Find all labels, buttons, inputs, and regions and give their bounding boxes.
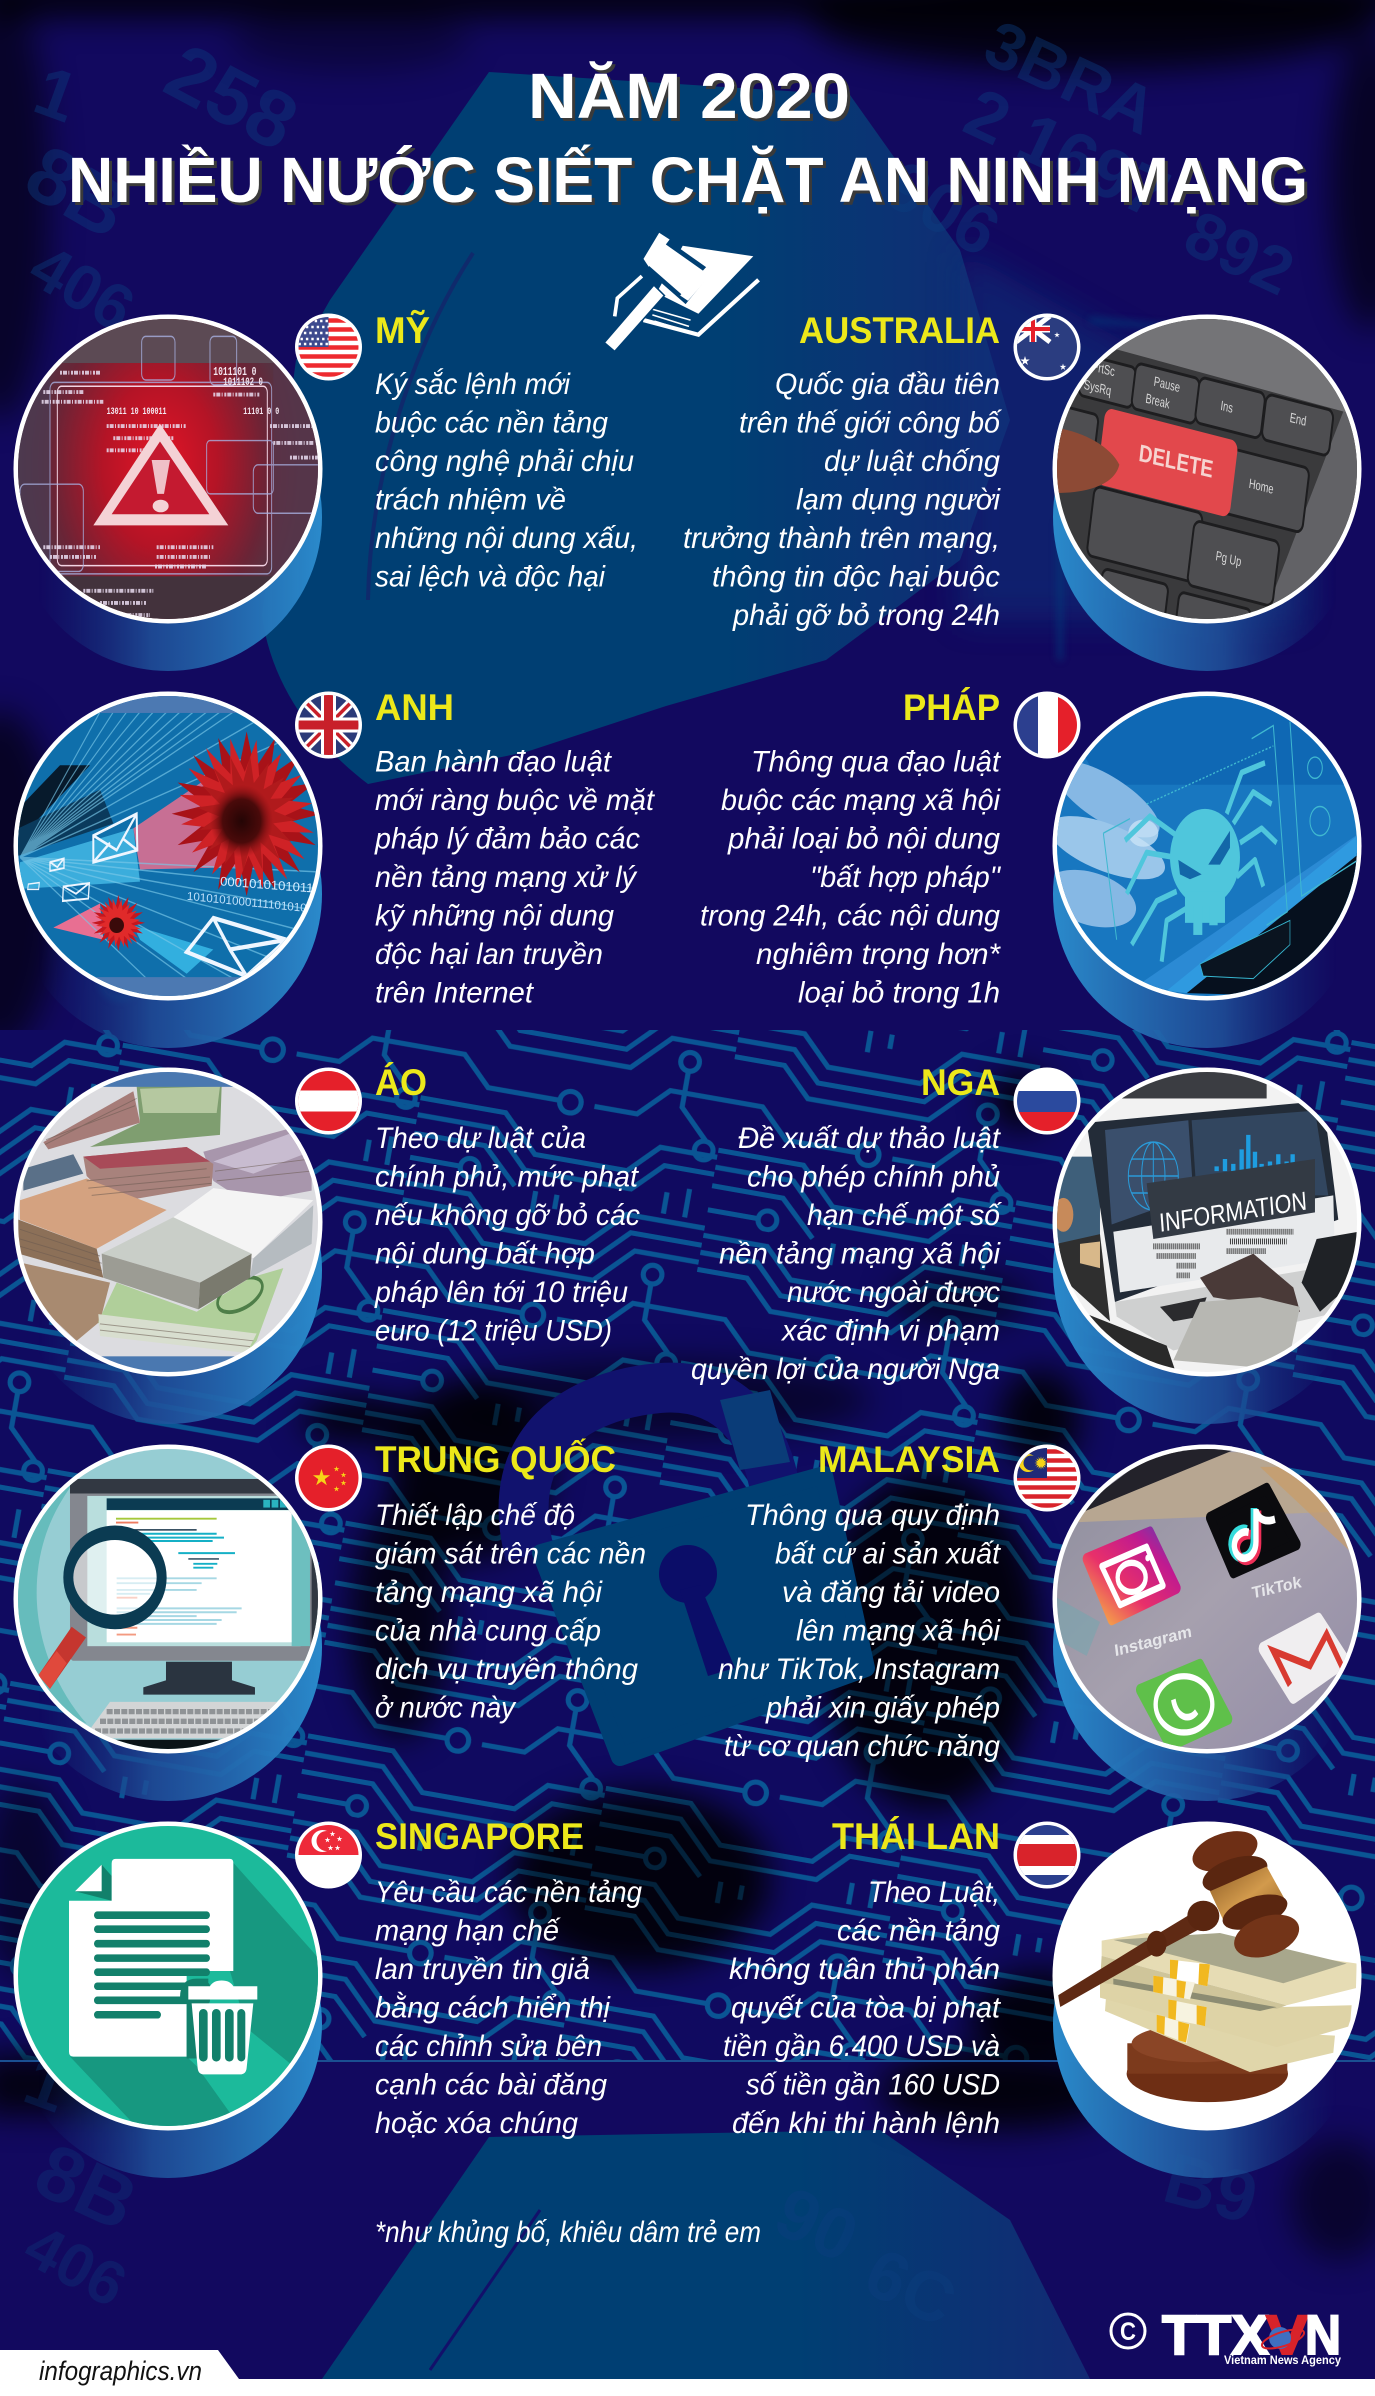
heading: Trung Quốc: TRUNG QUỐC — [375, 1438, 616, 1480]
image disc: euro banknotes — [14, 1068, 322, 1424]
text: Singapore — [375, 1876, 643, 2140]
text: Thái Lan: tiền gần 6.400 USD và — [723, 2030, 1000, 2063]
panel: Áo — [0, 1050, 640, 1424]
image disc: social app icons — [1033, 1433, 1375, 1801]
heading: Australia: AUSTRALIA — [799, 310, 1000, 351]
text: Australia: thông tin độc hại buộc — [712, 560, 1000, 594]
text: Áo: chính phủ, mức phạt — [375, 1160, 640, 1194]
text: Áo — [374, 1122, 640, 1348]
image disc: delete key: Break — [1145, 391, 1171, 412]
text: Pháp — [700, 746, 1002, 1010]
background: cyber data image (top) — [0, 0, 1375, 1050]
panel: Malaysia — [718, 1433, 1375, 1801]
image disc: delete key: Pause — [1153, 374, 1181, 396]
image disc: virus e-mail: 0001010101011 — [220, 875, 314, 896]
text: Singapore: bằng cách hiển thị — [375, 1992, 611, 2024]
heading: Malaysia: MALAYSIA — [818, 1439, 1000, 1480]
logo: TTXVN: Vietnam News Agency — [1224, 2353, 1341, 2367]
heading: Singapore: SINGAPORE — [375, 1816, 584, 1857]
background: cyber data image (top): 3BRA — [974, 6, 1168, 149]
background: cyber data image (top): 2 1697 — [954, 73, 1181, 234]
heading: Áo: ÁO — [375, 1062, 427, 1103]
logo: TTXVN: V — [1266, 2303, 1308, 2366]
text: Áo: nội dung bất hợp — [375, 1238, 595, 1270]
flag: Australia — [1014, 314, 1080, 380]
footnote: *như khủng bố, khiêu dâm trẻ em — [375, 2216, 761, 2249]
text: Áo: Theo dự luật của — [375, 1122, 586, 1155]
text: Áo: nếu không gỡ bỏ các — [375, 1199, 640, 1232]
footer band and source tab: infographics.vn — [39, 2356, 202, 2386]
logo: TTXVN: N — [1305, 2303, 1341, 2366]
image disc: delete key: Home — [1248, 476, 1274, 497]
text: Singapore: cạnh các bài đăng — [375, 2068, 608, 2102]
logo: TTXVN: TTX — [1162, 2303, 1269, 2366]
title — [68, 60, 1308, 216]
heading: Thái Lan: THÁI LAN — [832, 1816, 1000, 1857]
text: Áo: pháp lên tới 10 triệu — [374, 1276, 628, 1309]
text: Nga: hạn chế một số — [807, 1199, 1002, 1232]
background: data image (bottom): B9 — [1156, 2138, 1265, 2239]
image disc: delete key: PrtSc — [1091, 359, 1116, 380]
image disc: delete key: Ins — [1220, 398, 1234, 416]
flag: Austria — [295, 1068, 362, 1134]
text: Pháp: buộc các mạng xã hội — [721, 784, 1001, 817]
flag: Singapore — [295, 1822, 362, 1888]
background: data image (bottom): 8B — [23, 2126, 150, 2248]
image disc: delete key: DELETE — [1138, 440, 1215, 484]
text: Nga: Đề xuất dự thảo luật — [738, 1122, 1002, 1155]
background: padlock silhouette — [524, 1388, 866, 1757]
text: Trung Quốc — [375, 1499, 646, 1724]
text: Singapore: hoặc xóa chúng — [375, 2107, 579, 2140]
text: Mỹ: những nội dung xấu, — [375, 522, 638, 555]
text: Malaysia: phải xin giấy phép — [765, 1692, 1000, 1724]
text: Pháp: phải loại bỏ nội dung — [727, 822, 1001, 856]
image disc: monitor and magnifier — [0, 1428, 333, 1801]
background: cyber data image (top): 892 — [1174, 196, 1305, 309]
text: Nga: nước ngoài được — [787, 1276, 1000, 1309]
text: Pháp: loại bỏ trong 1h — [798, 976, 1000, 1010]
text: Singapore: các chỉnh sửa bên — [375, 2030, 602, 2063]
background: cyber data image (top): 8B — [12, 128, 145, 256]
text: Anh: pháp lý đảm bảo các — [374, 822, 640, 856]
panel: Mỹ — [0, 300, 638, 671]
text: Anh: độc hại lan truyền — [375, 938, 603, 971]
text: Trung Quốc: của nhà cung cấp — [375, 1614, 601, 1648]
flag: France — [1014, 692, 1080, 758]
text: Mỹ: công nghệ phải chịu — [375, 445, 634, 478]
icon: gavel on law book — [604, 233, 759, 351]
panel: Anh — [0, 678, 656, 1048]
panel: Nga — [691, 1050, 1375, 1424]
text: Thái Lan: quyết của tòa bị phạt — [731, 1992, 1002, 2024]
text: Australia: phải gỡ bỏ trong 24h — [732, 599, 1000, 632]
text: Australia — [683, 368, 1003, 632]
background: cyber data image (top): 406 — [18, 230, 146, 346]
logo: TTXVN — [1111, 2303, 1341, 2367]
image disc: cyber alert: 13011 10 100011 — [107, 407, 167, 417]
heading: Pháp: PHÁP — [903, 687, 1000, 728]
text: Thái Lan — [723, 1876, 1002, 2140]
text: Australia: Quốc gia đầu tiên — [775, 368, 1000, 401]
background: cyber data image (top): 1 — [25, 51, 88, 137]
text: Australia: trưởng thành trên mạng, — [683, 522, 1000, 555]
logo: TTXVN: C — [1120, 2318, 1136, 2346]
background: data image (bottom) — [0, 2041, 1375, 2379]
text: Trung Quốc: dịch vụ truyền thông — [375, 1653, 639, 1686]
text: Nga: xác định vi phạm — [780, 1314, 1000, 1348]
background: data image (bottom): 90 — [763, 2172, 870, 2278]
panel: Pháp — [700, 683, 1375, 1048]
text: Pháp: trong 24h, các nội dung — [700, 900, 1001, 932]
text: Trung Quốc: Thiết lập chế độ — [375, 1499, 575, 1532]
text: Nga: nền tảng mạng xã hội — [719, 1238, 1001, 1270]
flag: Thailand — [1014, 1822, 1080, 1888]
text: Áo: euro (12 triệu USD) — [375, 1314, 612, 1348]
title: NĂM 2020 — [528, 60, 850, 132]
image disc: cyber alert: 1011102 0 — [223, 376, 263, 388]
heading: Anh: ANH — [375, 687, 454, 728]
panel: Thái Lan — [723, 1816, 1362, 2178]
image disc: information laptop — [1052, 1068, 1362, 1424]
text: Thái Lan: đến khi thi hành lệnh — [732, 2107, 1000, 2140]
text: Anh: trên Internet — [375, 976, 535, 1010]
text: Pháp: nghiêm trọng hơn* — [756, 938, 1002, 971]
flag: USA — [295, 314, 362, 380]
background: cyber data image (top): 258 — [152, 26, 312, 168]
flag: UK — [295, 692, 362, 758]
text: Nga — [691, 1122, 1002, 1386]
text: Australia: trên thế giới công bố — [739, 406, 1003, 440]
text: Mỹ: buộc các nền tảng — [375, 406, 609, 440]
image disc: gavel on money — [1052, 1822, 1362, 2178]
text: Thái Lan: không tuân thủ phán — [729, 1953, 1000, 1986]
text: Australia: lạm dụng người — [796, 484, 1001, 516]
panel: Singapore — [0, 1800, 643, 2178]
text: Thái Lan: các nền tảng — [837, 1914, 1001, 1948]
image disc: delete key: Pg Up — [1215, 548, 1242, 570]
image disc: document and trash bin — [0, 1800, 333, 2178]
panel: Australia — [683, 300, 1375, 671]
heading: Mỹ: MỸ — [375, 309, 430, 351]
text: Singapore: mạng hạn chế — [375, 1914, 562, 1948]
background: data image (bottom): 6C — [854, 2233, 968, 2341]
image disc: cyber alert — [14, 314, 322, 671]
text: Singapore: Yêu cầu các nền tảng — [375, 1876, 643, 1909]
text: Trung Quốc: giám sát trên các nền — [375, 1538, 646, 1570]
text: Malaysia — [718, 1499, 1002, 1763]
text: Anh — [374, 746, 656, 1010]
text: Anh: nền tảng mạng xử lý — [375, 861, 638, 894]
panel: Trung Quốc — [0, 1428, 646, 1801]
text: Nga: quyền lợi của người Nga — [691, 1353, 1000, 1386]
image disc: cyber alert: 11101 0 0 — [243, 407, 279, 417]
text: Malaysia: từ cơ quan chức năng — [724, 1730, 1001, 1763]
text: Mỹ: Ký sắc lệnh mới — [375, 368, 571, 401]
flag: Russia — [1014, 1068, 1080, 1134]
text: Anh: mới ràng buộc về mặt — [375, 784, 656, 817]
text: Trung Quốc: ở nước này — [375, 1692, 517, 1724]
image disc: delete key: End — [1289, 410, 1307, 429]
text: Malaysia: bất cứ ai sản xuất — [775, 1538, 1002, 1570]
flag: China — [295, 1444, 362, 1512]
flag: Malaysia — [1014, 1444, 1080, 1512]
image disc: social app icons: TikTok — [1251, 1572, 1302, 1602]
image disc: spider malware — [1052, 692, 1362, 1048]
image disc: virus e-mail — [14, 692, 322, 1048]
text: Anh: kỹ những nội dung — [375, 900, 615, 932]
image disc: delete key — [1052, 314, 1362, 671]
text: Trung Quốc: tảng mạng xã hội — [375, 1576, 603, 1609]
text: Singapore: lan truyền tin giả — [375, 1953, 590, 1986]
text: Mỹ — [375, 368, 638, 594]
text: Australia: dự luật chống — [824, 445, 1001, 478]
text: Malaysia: Thông qua quy định — [745, 1499, 1000, 1532]
background: cyber data image (top): 906 — [872, 145, 1013, 271]
text: Malaysia: như TikTok, Instagram — [718, 1653, 1000, 1686]
text: Nga: cho phép chính phủ — [747, 1160, 1000, 1194]
image disc: delete key: SysRq — [1083, 377, 1112, 399]
text: Thái Lan: số tiền gần 160 USD — [746, 2068, 1000, 2102]
text: Anh: Ban hành đạo luật — [375, 746, 613, 778]
image disc: cyber alert: 1011101 0 — [213, 366, 256, 379]
text: Pháp: "bất hợp pháp" — [810, 861, 1001, 894]
text: Malaysia: lên mạng xã hội — [796, 1614, 1001, 1648]
image disc: social app icons: Instagram — [1113, 1622, 1193, 1660]
text: Malaysia: và đăng tải video — [782, 1576, 1000, 1609]
text: Mỹ: trách nhiệm về — [375, 484, 566, 516]
text: Pháp: Thông qua đạo luật — [751, 746, 1002, 778]
image disc: information laptop: INFORMATION — [1158, 1186, 1308, 1238]
text: Mỹ: sai lệch và độc hại — [375, 560, 606, 594]
background: data image (bottom): 1 — [15, 2041, 78, 2127]
footer band and source tab — [0, 2350, 1375, 2396]
image disc: virus e-mail: 1010101000111101010 — [187, 890, 307, 916]
heading: Nga: NGA — [921, 1062, 1000, 1103]
text: Thái Lan: Theo Luật, — [868, 1876, 1000, 1909]
title: NHIỀU NƯỚC SIẾT CHẶT AN NINH MẠNG — [68, 144, 1308, 216]
background: data image (bottom): 406 — [13, 2211, 137, 2321]
background: circuit board with padlock — [0, 1030, 1375, 2070]
